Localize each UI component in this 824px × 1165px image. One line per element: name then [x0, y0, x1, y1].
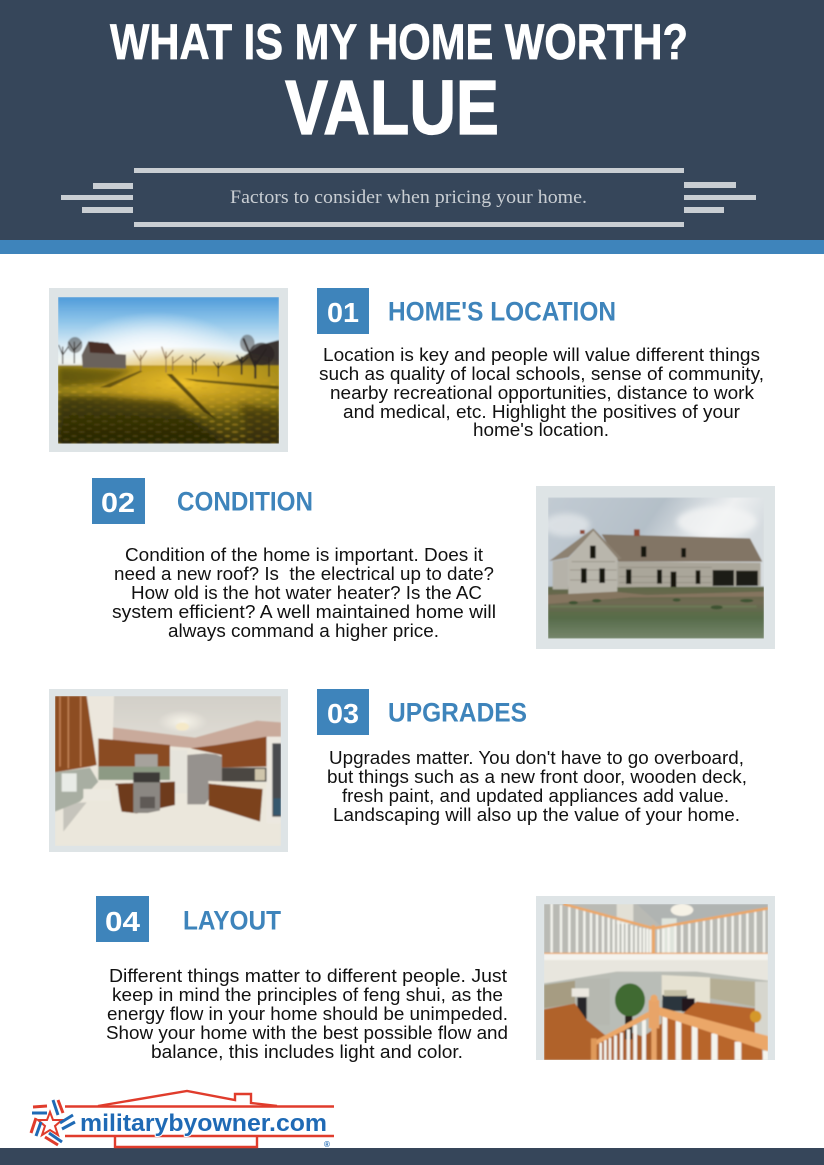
- photo: weathered farmhouse: [536, 486, 775, 649]
- panel: upgrades: [49, 689, 747, 852]
- text: condition description: [112, 545, 496, 641]
- text: location description: and medical, etc. Highlight the positives of your: [343, 402, 740, 422]
- photo: barn in sunlit field: [49, 288, 310, 452]
- number badge 03: [317, 689, 369, 735]
- number badge 03: 03: [327, 698, 359, 729]
- heading: upgrades: UPGRADES: [388, 698, 527, 728]
- number badge 01: [317, 288, 369, 334]
- heading: layout: LAYOUT: [183, 906, 281, 936]
- subtitle ribbon: Factors to consider when pricing your home.: [230, 187, 587, 208]
- text: upgrades description: Upgrades matter. You don't have to go overboard,: [329, 748, 744, 768]
- header band: [0, 0, 824, 254]
- subject heading: value: VALUE: [285, 65, 499, 151]
- text: location description: nearby recreational opportunities, distance to work: [330, 383, 755, 403]
- text: layout description: [106, 966, 508, 1062]
- panel: home's location: [49, 288, 764, 452]
- number badge 02: [92, 478, 145, 524]
- header accent stripe: [0, 240, 824, 254]
- heading: condition: CONDITION: [177, 486, 313, 516]
- photo: two-storey interior with staircase: [536, 896, 775, 1060]
- number badge 04: 04: [105, 906, 140, 937]
- panel: layout: [96, 896, 775, 1062]
- number badge 02: 02: [101, 487, 135, 518]
- panel: condition: [92, 478, 775, 649]
- text: location description: Location is key and people will value different things: [323, 345, 760, 365]
- logo wordmark text: militarybyowner.com: [80, 1110, 327, 1137]
- text: layout description: energy flow in your home should be unimpeded.: [107, 1004, 508, 1024]
- text: location description: [319, 345, 764, 440]
- text: location description: such as quality of local schools, sense of community,: [319, 364, 764, 384]
- text: upgrades description: Landscaping will also up the value of your home.: [333, 805, 740, 825]
- text: condition description: How old is the hot water heater? Is the AC: [131, 583, 482, 603]
- text: layout description: Different things matter to different people. Just: [109, 966, 507, 986]
- text: layout description: Show your home with the best possible flow and: [106, 1023, 508, 1043]
- logo house outline: [65, 1091, 334, 1147]
- subtitle ribbon: [61, 168, 756, 227]
- heading: home's location: HOME'S LOCATION: [388, 296, 616, 326]
- text: condition description: need a new roof? Is the electrical up to date?: [114, 564, 494, 584]
- text: layout description: keep in mind the principles of feng shui, as the: [112, 985, 503, 1005]
- text: layout description: balance, this includes light and color.: [151, 1042, 463, 1062]
- logo: militarybyowner.com: [31, 1091, 334, 1149]
- text: condition description: Condition of the home is important. Does it: [125, 545, 483, 565]
- title: WHAT IS MY HOME WORTH?: [110, 14, 688, 70]
- text: upgrades description: fresh paint, and updated appliances add value.: [342, 786, 729, 806]
- registered mark: ®: [324, 1140, 330, 1149]
- text: upgrades description: [327, 748, 747, 825]
- number badge 04: [96, 896, 149, 942]
- footer band: [0, 1148, 824, 1165]
- text: upgrades description: but things such as a new front door, wooden deck,: [327, 767, 747, 787]
- text: condition description: always command a higher price.: [168, 621, 439, 641]
- number badge 01: 01: [327, 297, 359, 328]
- text: location description: home's location.: [473, 420, 609, 440]
- photo: kitchen: [49, 689, 288, 852]
- text: condition description: system efficient? A well maintained home will: [112, 602, 496, 622]
- logo star emblem: [31, 1100, 75, 1145]
